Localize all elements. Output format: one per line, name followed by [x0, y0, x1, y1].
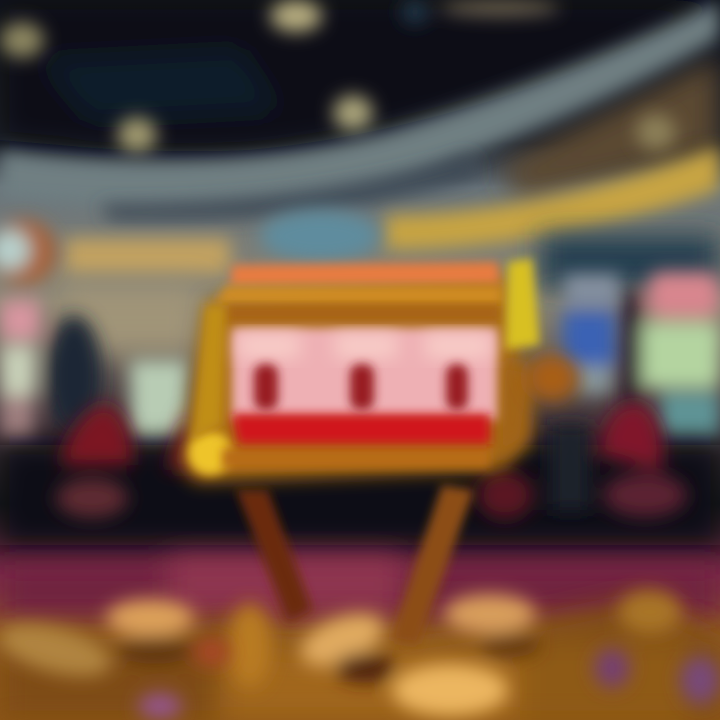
lever knob: [526, 354, 578, 402]
warm balcony section: [500, 55, 720, 200]
gold curved band: [385, 145, 720, 250]
left gold band: [65, 238, 230, 274]
gold pile base: [0, 600, 720, 720]
coin: right: [444, 594, 536, 634]
back wall panels: [60, 235, 720, 355]
grey curved ceiling band: [0, 0, 720, 206]
red chairs: [56, 402, 687, 519]
blue middle slot machine: [562, 274, 620, 394]
balcony light: [636, 114, 676, 150]
dark lower band: [0, 445, 720, 545]
coin: front: [392, 664, 508, 716]
gold spike: [228, 603, 272, 687]
machine dark lip: [225, 306, 500, 320]
coins: [0, 590, 720, 719]
right side slot machine: [618, 272, 720, 438]
machine top gold lip: [215, 286, 502, 304]
coin: center: [293, 603, 391, 677]
left side slot machine: [0, 220, 102, 440]
red token: [194, 638, 230, 666]
reels red bottom: [232, 414, 490, 444]
yellow right edge: [505, 258, 540, 350]
reel symbols: [254, 364, 468, 410]
floor: maroon carpet: [0, 555, 720, 615]
ceiling: dark navy: [0, 0, 720, 151]
coin shadow right: [480, 633, 540, 657]
teal dome behind machine: [260, 210, 380, 262]
yellow bottom-left corner: [188, 431, 232, 475]
pale panel: [130, 360, 188, 440]
reel highlights: [238, 334, 491, 358]
brown lower right: [495, 360, 535, 465]
purple tokens: [138, 693, 182, 719]
coin: far left: [0, 614, 117, 686]
machine top orange stripe: [230, 262, 500, 286]
coin: left: [106, 599, 194, 637]
darker stripe in grey band: [100, 155, 480, 220]
slot machine: [182, 258, 578, 482]
left gold edge: [192, 305, 226, 440]
ceiling lights: [0, 0, 560, 153]
coin: far right: [618, 590, 682, 634]
machine body: [182, 275, 530, 482]
coin shadow: [119, 636, 191, 664]
coin shadow center: [335, 653, 395, 683]
reels panel: [232, 328, 497, 420]
slot machine stand legs: [236, 485, 474, 645]
lower orange strip: [222, 448, 490, 468]
